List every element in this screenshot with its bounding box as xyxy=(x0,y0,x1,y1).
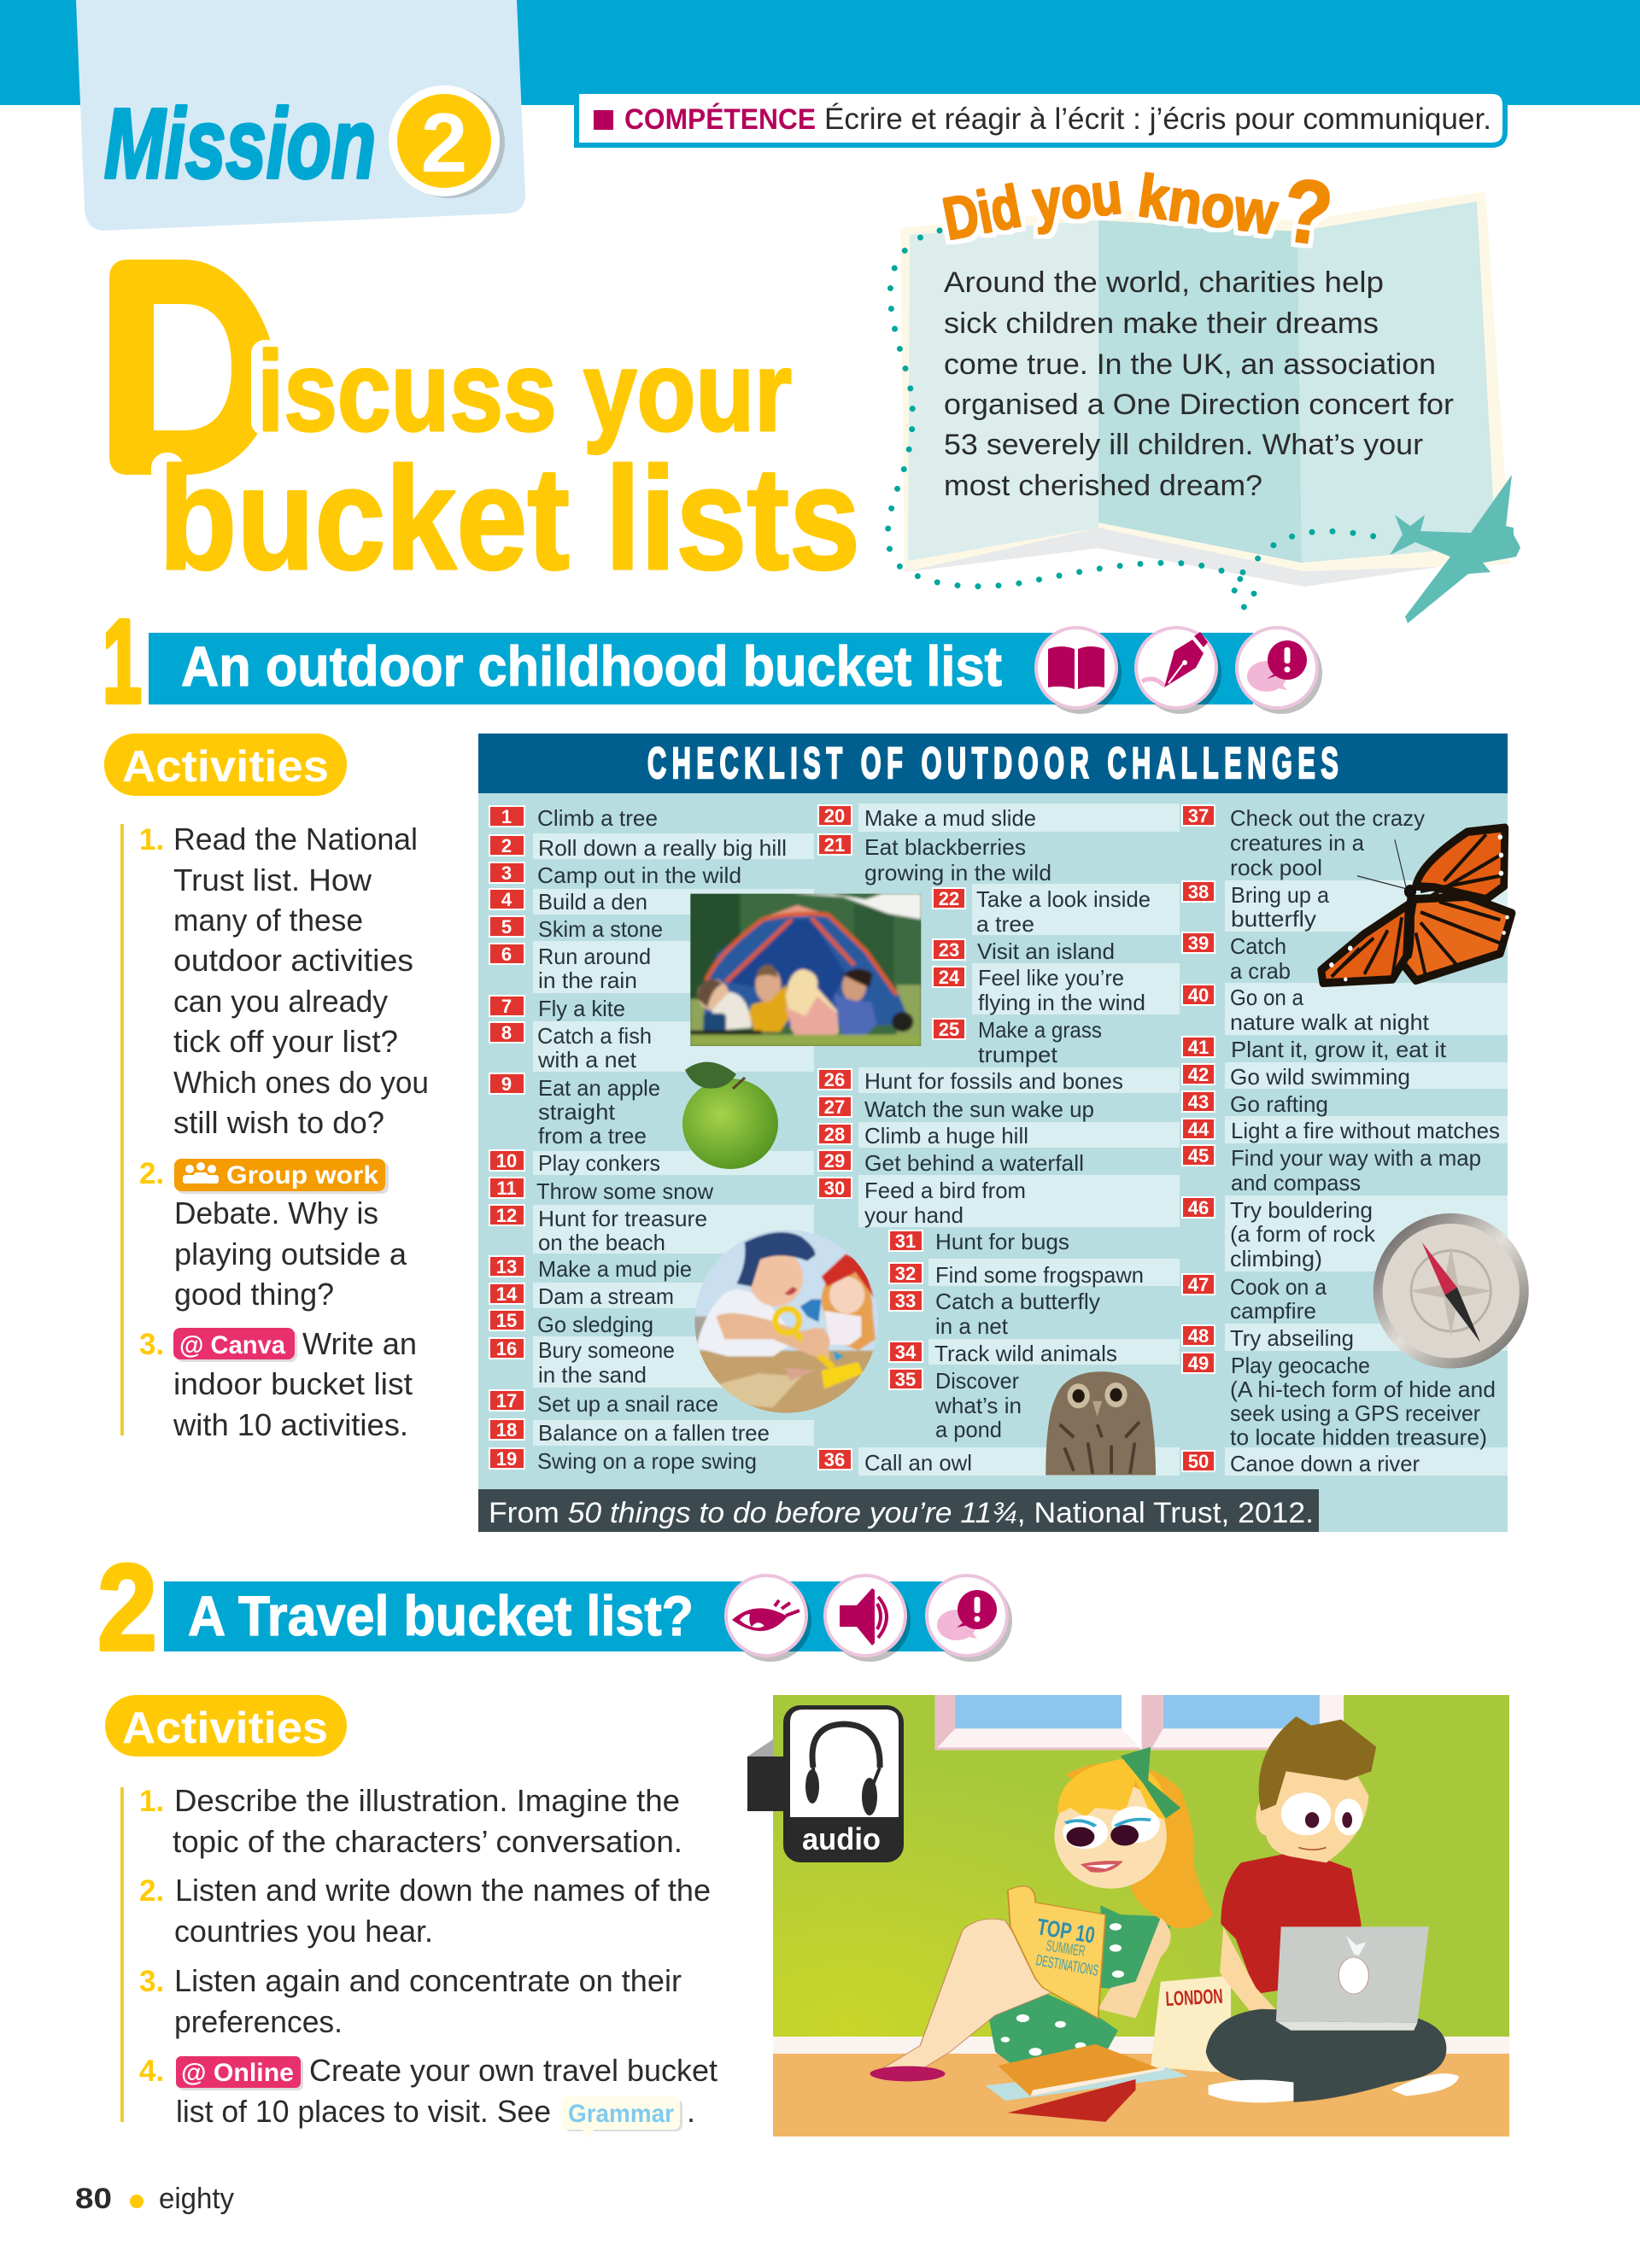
did you know body text: most cherished dream? xyxy=(944,470,1262,502)
magazine cover text: TOP 10 xyxy=(1035,1914,1097,1949)
icon: eye xyxy=(726,1575,811,1662)
audio badge xyxy=(747,1705,904,1862)
activity 3: Listen again and concentrate on their xyxy=(174,1963,682,1998)
activity 1: topic of the characters’ conversation. xyxy=(173,1824,682,1859)
checklist column 3 xyxy=(1182,805,1500,1476)
photo: family at a tent xyxy=(690,893,921,1046)
competence box: COMPÉTENCE xyxy=(624,103,816,136)
activity 3 xyxy=(139,1963,682,2039)
item 17: 17 xyxy=(496,1390,517,1412)
activity 1: 1. xyxy=(139,823,164,856)
activity 2: 2. xyxy=(139,1874,164,1908)
item 45 xyxy=(1182,1145,1481,1195)
activity 3: 3. xyxy=(139,1965,164,1998)
section number 1: 1 xyxy=(102,596,142,728)
activity 3 xyxy=(139,1326,417,1442)
item 50: 50 xyxy=(1188,1451,1209,1472)
activity 2: good thing? xyxy=(174,1277,334,1312)
magazine cover text: SUMMER xyxy=(1045,1937,1086,1960)
item 25: Make a grass xyxy=(978,1017,1102,1043)
icon: speaker xyxy=(825,1575,911,1662)
item 39: Catch xyxy=(1230,933,1286,959)
activity 2 xyxy=(139,1157,407,1312)
item 8: Catch a fish xyxy=(537,1023,652,1049)
item 43 xyxy=(1182,1091,1328,1117)
activity 3: indoor bucket list xyxy=(173,1366,413,1401)
item 15: Go sledging xyxy=(537,1312,653,1337)
did you know heading: you xyxy=(1029,159,1125,235)
item 41: 41 xyxy=(1188,1037,1209,1058)
item 18: Balance on a fallen tree xyxy=(538,1420,770,1446)
item 13: Make a mud pie xyxy=(538,1256,692,1282)
item 3: Camp out in the wild xyxy=(537,862,741,888)
item 32: Find some frogspawn xyxy=(935,1262,1144,1288)
dotted flight path xyxy=(887,231,1378,607)
item 39: 39 xyxy=(1188,932,1209,954)
activity 3: Write an xyxy=(302,1326,417,1361)
item 38: Bring up a xyxy=(1231,882,1330,908)
item 15 xyxy=(489,1310,653,1337)
item 18: 18 xyxy=(496,1419,517,1441)
section 2 header xyxy=(97,1539,1012,1676)
did you know body text xyxy=(944,266,1454,502)
item 28: 28 xyxy=(824,1124,845,1145)
item 30: 30 xyxy=(824,1178,845,1199)
activity 4 xyxy=(139,2053,718,2139)
item 19: 19 xyxy=(496,1448,517,1470)
competence box xyxy=(577,91,1505,145)
icon: plane xyxy=(1390,475,1520,623)
item 36: 36 xyxy=(824,1449,845,1470)
activity 2: Debate. Why is xyxy=(174,1195,378,1230)
icon: pen nib xyxy=(1136,628,1221,714)
activities list 2 xyxy=(120,1783,718,2139)
item 37: rock pool xyxy=(1230,855,1322,880)
activity 1: Describe the illustration. Imagine the xyxy=(174,1783,680,1818)
group work label: Group work xyxy=(226,1161,378,1190)
item 31: 31 xyxy=(895,1230,916,1252)
item 24: 24 xyxy=(939,967,960,988)
activity 1: Which ones do you xyxy=(173,1065,429,1100)
grammar tag: Grammar xyxy=(568,2100,674,2128)
bag xyxy=(1151,1976,1231,2073)
item 22: a tree xyxy=(976,911,1034,937)
item 22: Take a look inside xyxy=(976,886,1151,912)
travel magazine xyxy=(1008,1886,1105,2019)
canva label: @ Canva xyxy=(179,1331,285,1359)
magazine cover text xyxy=(1035,1918,1098,1976)
item 49 xyxy=(1182,1353,1496,1450)
page number: eighty xyxy=(159,2183,234,2215)
item 41: Plant it, grow it, eat it xyxy=(1231,1037,1447,1062)
item 36 xyxy=(818,1449,972,1476)
activity 1: still wish to do? xyxy=(173,1105,384,1140)
item 47 xyxy=(1182,1274,1327,1324)
item 44: 44 xyxy=(1188,1119,1210,1140)
item 24: flying in the wind xyxy=(978,990,1145,1015)
item 14: 14 xyxy=(496,1283,518,1305)
activity 2 xyxy=(139,1873,711,1949)
item 40: Go on a xyxy=(1230,985,1303,1010)
activity 4: list of 10 places to visit. See xyxy=(176,2094,551,2129)
item 21: 21 xyxy=(824,834,845,856)
item 11: 11 xyxy=(496,1178,517,1199)
item 12: Hunt for treasure xyxy=(538,1206,707,1231)
item 50: Canoe down a river xyxy=(1230,1451,1420,1476)
checklist column 1 xyxy=(489,805,787,1474)
item 42: 42 xyxy=(1188,1064,1209,1085)
item 9: 9 xyxy=(501,1073,512,1095)
photo: compass xyxy=(1374,1213,1529,1369)
item 30 xyxy=(818,1178,1026,1228)
item 35: what’s in xyxy=(934,1393,1022,1418)
item 35 xyxy=(889,1368,1022,1442)
item 47: campfire xyxy=(1230,1298,1316,1324)
item 15: 15 xyxy=(496,1310,517,1331)
item 12: 12 xyxy=(496,1205,517,1226)
checklist column 2 xyxy=(818,805,1151,1476)
item 39 xyxy=(1182,932,1291,984)
did you know body text: come true. In the UK, an association xyxy=(944,348,1436,381)
title: Discuss your bucket lists: bucket lists xyxy=(159,437,860,600)
activity 1: 1. xyxy=(139,1785,164,1818)
did you know heading: Did xyxy=(938,172,1026,253)
item 1: Climb a tree xyxy=(537,805,658,831)
item 34: Track wild animals xyxy=(934,1341,1117,1366)
item 38: 38 xyxy=(1188,881,1209,903)
item 44: Light a fire without matches xyxy=(1231,1118,1500,1143)
window xyxy=(935,1695,1344,1750)
activity 1: can you already xyxy=(173,984,388,1019)
activity 4: 4. xyxy=(139,2055,164,2088)
item 38 xyxy=(1182,881,1330,932)
item 21: growing in the wild xyxy=(864,860,1051,886)
item 2: Roll down a really big hill xyxy=(538,835,787,861)
item 34: 34 xyxy=(895,1342,917,1363)
books xyxy=(985,2044,1188,2122)
item 26: 26 xyxy=(824,1069,845,1090)
item 5: 5 xyxy=(501,916,512,938)
item 9 xyxy=(489,1073,660,1149)
item 9: Eat an apple xyxy=(538,1075,660,1101)
item 3: 3 xyxy=(501,862,512,884)
item 14: Dam a stream xyxy=(538,1283,674,1309)
item 6: in the rain xyxy=(538,967,637,993)
item 47: Cook on a xyxy=(1230,1274,1327,1300)
item 17: Set up a snail race xyxy=(537,1391,718,1417)
icon: headphones xyxy=(805,1724,880,1815)
mission tab xyxy=(76,0,525,231)
magazine cover text: DESTINATIONS xyxy=(1034,1951,1100,1979)
item 40: 40 xyxy=(1188,985,1209,1006)
item 39: a crab xyxy=(1230,958,1291,984)
item 31: Hunt for bugs xyxy=(935,1229,1069,1254)
item 6: 6 xyxy=(501,944,512,965)
top banner xyxy=(0,0,1640,105)
activity 2: Listen and write down the names of the xyxy=(175,1873,711,1908)
panel: checklist of outdoor challenges xyxy=(478,734,1529,1532)
activity 1: Trust list. How xyxy=(173,862,372,897)
item 11: Throw some snow xyxy=(536,1178,713,1204)
online label: @ Online xyxy=(181,2059,294,2087)
item 49: (A hi-tech form of hide and xyxy=(1230,1377,1496,1402)
item 4: 4 xyxy=(501,889,512,910)
item 48: 48 xyxy=(1188,1325,1209,1347)
item 32: 32 xyxy=(895,1263,916,1284)
item 35: a pond xyxy=(935,1417,1002,1442)
item 33: Catch a butterfly xyxy=(935,1289,1100,1314)
item 48: Try abseiling xyxy=(1230,1325,1354,1351)
bag label: LONDON xyxy=(1165,1985,1223,2011)
item 19: Swing on a rope swing xyxy=(537,1448,757,1474)
item 16: 16 xyxy=(496,1338,517,1359)
activity 1 xyxy=(139,1783,682,1859)
item 4: Build a den xyxy=(538,889,647,915)
item 28: Climb a huge hill xyxy=(864,1123,1028,1149)
source credit bar: From 50 things to do before you’re 11¾ , National Trust, 2012. xyxy=(489,1497,1314,1529)
item 1: 1 xyxy=(501,806,512,827)
activity 3: preferences. xyxy=(174,2004,343,2039)
item 21 xyxy=(818,834,1051,886)
item 33 xyxy=(889,1289,1100,1339)
item 49: seek using a GPS receiver xyxy=(1230,1400,1480,1426)
page number xyxy=(75,2183,234,2215)
section number 2: 2 xyxy=(97,1539,157,1676)
activity 2: countries you hear. xyxy=(174,1914,433,1949)
item 46 xyxy=(1182,1197,1376,1271)
photo: owl xyxy=(1046,1371,1156,1475)
activity 2: 2. xyxy=(139,1157,164,1190)
item 49: Play geocache xyxy=(1231,1353,1370,1378)
item 10 xyxy=(489,1150,660,1176)
did you know body text: sick children make their dreams xyxy=(944,307,1379,340)
item 20: Make a mud slide xyxy=(864,805,1036,831)
did you know heading xyxy=(938,159,1338,266)
illustration: two teens planning travel xyxy=(773,1695,1509,2136)
item 13: 13 xyxy=(496,1256,517,1277)
item 38: butterfly xyxy=(1231,906,1316,932)
did you know body text: Around the world, charities help xyxy=(944,266,1384,299)
item 24: Feel like you’re xyxy=(978,965,1124,991)
item 12 xyxy=(489,1205,707,1255)
activities list 1 xyxy=(120,821,429,1442)
item 22 xyxy=(933,886,1151,937)
item 9: from a tree xyxy=(538,1123,647,1149)
photo: green apple xyxy=(682,1062,778,1169)
item 29: 29 xyxy=(824,1150,845,1172)
item 36: Call an owl xyxy=(864,1450,972,1476)
activity 3: 3. xyxy=(139,1328,164,1361)
item 43: Go rafting xyxy=(1230,1091,1328,1117)
activities pill 1: Activities xyxy=(122,742,329,792)
item 45: 45 xyxy=(1188,1145,1209,1166)
item 5: Skim a stone xyxy=(538,916,663,942)
activity 1: Read the National xyxy=(173,821,418,856)
item 45: Find your way with a map xyxy=(1231,1145,1481,1171)
item 25 xyxy=(933,1017,1102,1067)
laptop xyxy=(1271,1926,1429,2031)
item 9: straight xyxy=(538,1099,616,1125)
checklist heading: CHECKLIST OF OUTDOOR CHALLENGES xyxy=(647,739,1338,787)
item 7 xyxy=(489,996,625,1021)
item 16 xyxy=(489,1337,675,1388)
audio badge: audio xyxy=(802,1821,881,1856)
icon: speech bubbles xyxy=(927,1575,1012,1662)
section 1 heading: An outdoor childhood bucket list xyxy=(181,634,1002,698)
icon: book xyxy=(1036,628,1122,714)
item 35: Discover xyxy=(935,1368,1019,1394)
mission label: Mission xyxy=(104,88,376,199)
item 2: 2 xyxy=(501,835,512,856)
item 35: 35 xyxy=(895,1369,916,1390)
item 16: Bury someone xyxy=(538,1337,675,1363)
photo: children in the sand xyxy=(694,1230,878,1413)
activities pill 1 xyxy=(104,734,347,796)
activity 1: tick off your list? xyxy=(173,1024,398,1059)
item 30: Feed a bird from xyxy=(864,1178,1026,1203)
item 12: on the beach xyxy=(538,1230,665,1255)
mission number badge: 2 xyxy=(421,96,467,190)
activity 1: outdoor activities xyxy=(173,943,413,978)
item 33: 33 xyxy=(895,1290,916,1312)
item 33: in a net xyxy=(935,1313,1009,1339)
item 30: your hand xyxy=(864,1202,964,1228)
item 7: Fly a kite xyxy=(538,996,625,1021)
activity 2: playing outside a xyxy=(174,1236,407,1271)
mission number badge xyxy=(389,85,505,198)
item 27: 27 xyxy=(824,1096,845,1118)
section 1 header xyxy=(102,596,1322,728)
did you know heading: know xyxy=(1134,162,1282,248)
item 40 xyxy=(1182,985,1430,1035)
item 37 xyxy=(1182,805,1425,880)
item 37: 37 xyxy=(1188,805,1209,827)
activity 1 xyxy=(139,821,429,1140)
competence box: Écrire et réagir à l’écrit : j’écris pour communiquer. xyxy=(824,102,1491,136)
activity 1: many of these xyxy=(173,903,363,938)
item 10: 10 xyxy=(496,1150,517,1172)
item 22: 22 xyxy=(939,888,959,909)
item 37: creatures in a xyxy=(1230,830,1365,856)
activities pill 2 xyxy=(105,1695,347,1757)
panel: did you know map xyxy=(887,159,1520,623)
did you know body text: organised a One Direction concert for xyxy=(944,389,1454,421)
grammar tag xyxy=(561,2096,682,2139)
item 7: 7 xyxy=(501,996,512,1017)
item 8: 8 xyxy=(501,1022,512,1043)
item 20: 20 xyxy=(824,805,845,827)
item 40: nature walk at night xyxy=(1230,1009,1430,1035)
activity 3: with 10 activities. xyxy=(173,1407,408,1442)
item 23: 23 xyxy=(939,939,959,961)
item 25: 25 xyxy=(939,1019,959,1040)
activity 4: Create your own travel bucket xyxy=(309,2053,718,2088)
item 21: Eat blackberries xyxy=(864,834,1026,860)
icon: speech bubbles xyxy=(1237,628,1322,714)
item 16: in the sand xyxy=(538,1362,647,1388)
item 37: Check out the crazy xyxy=(1230,805,1425,831)
section 2 heading: A Travel bucket list? xyxy=(188,1584,694,1647)
item 25: trumpet xyxy=(978,1042,1058,1067)
girl xyxy=(870,1747,1213,2081)
item 4 xyxy=(489,889,647,915)
photo: butterfly xyxy=(1321,827,1512,983)
item 26: Hunt for fossils and bones xyxy=(864,1068,1123,1094)
item 49: 49 xyxy=(1188,1353,1209,1374)
did you know heading: ? xyxy=(1277,160,1338,266)
item 46: (a form of rock xyxy=(1230,1221,1376,1247)
item 24 xyxy=(933,965,1145,1015)
item 6 xyxy=(489,944,651,993)
item 46: Try bouldering xyxy=(1230,1197,1373,1223)
item 29: Get behind a waterfall xyxy=(864,1150,1084,1176)
item 23: Visit an island xyxy=(977,938,1115,964)
activities pill 2: Activities xyxy=(122,1704,328,1753)
title: Discuss your bucket lists xyxy=(109,260,860,600)
item 45: and compass xyxy=(1231,1170,1361,1195)
item 46: climbing) xyxy=(1230,1246,1322,1271)
item 27: Watch the sun wake up xyxy=(864,1096,1094,1122)
item 8 xyxy=(489,1022,652,1073)
page number: 80 xyxy=(75,2183,112,2215)
item 6: Run around xyxy=(538,944,651,969)
item 49: to locate hidden treasure) xyxy=(1230,1424,1487,1450)
item 47: 47 xyxy=(1188,1274,1209,1295)
item 42: Go wild swimming xyxy=(1230,1064,1410,1090)
item 46: 46 xyxy=(1188,1197,1209,1219)
boy xyxy=(1206,1716,1459,2102)
activity 4: . xyxy=(687,2094,695,2129)
group work label xyxy=(174,1159,389,1194)
item 43: 43 xyxy=(1188,1091,1209,1113)
item 8: with a net xyxy=(537,1047,637,1073)
item 10: Play conkers xyxy=(538,1150,660,1176)
title: Discuss your bucket lists: iscuss your xyxy=(257,329,792,455)
did you know body text: 53 severely ill children. What’s your xyxy=(944,429,1423,461)
